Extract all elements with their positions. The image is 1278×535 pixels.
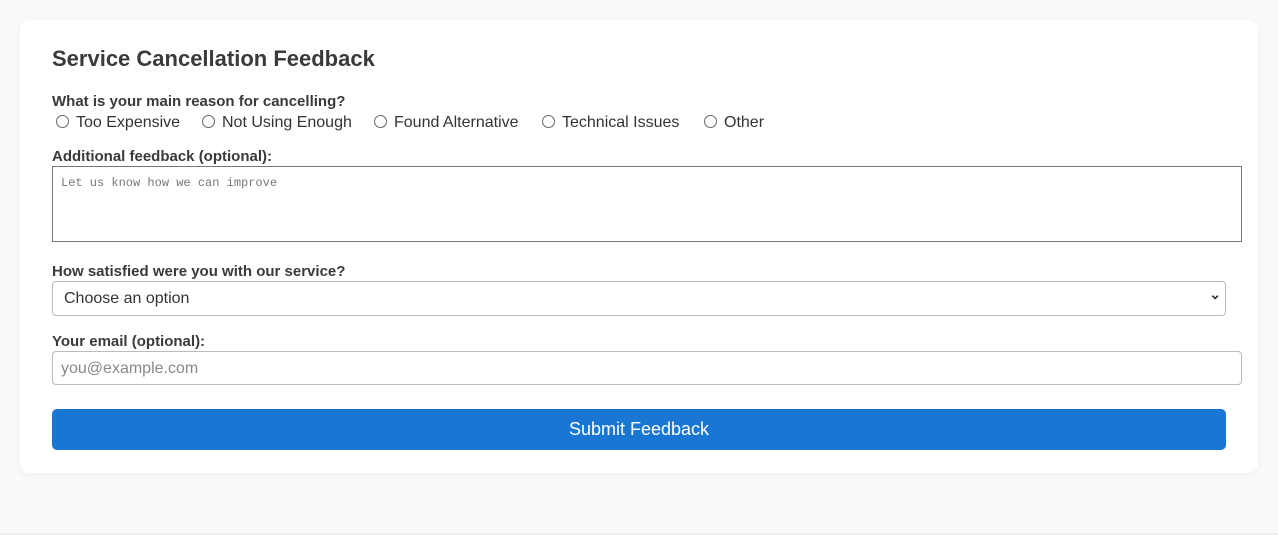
textarea: Let us know how we can improve: [61, 176, 277, 190]
radio: not using enough: Not Using Enough: [222, 114, 352, 131]
radio: other: [704, 114, 764, 131]
select dropdown: ⌄: [1209, 286, 1221, 302]
select dropdown: Choose an option: [64, 290, 189, 307]
label: satisfaction: How satisfied were you with our service?: [52, 263, 345, 280]
title: Service Cancellation Feedback: [52, 46, 375, 71]
radio options: [56, 114, 764, 131]
label: reason question: What is your main reason for cancelling?: [52, 93, 345, 110]
radio: too expensive: Too Expensive: [76, 114, 180, 131]
radio: technical issues: Technical Issues: [562, 114, 679, 131]
radio: found alternative: Found Alternative: [394, 114, 519, 131]
email input: [52, 351, 1242, 385]
select dropdown: [52, 281, 1226, 316]
label: email: Your email (optional):: [52, 333, 205, 350]
email input: you@example.com: [61, 360, 198, 377]
radio: other: Other: [724, 114, 764, 131]
textarea: [52, 166, 1242, 242]
label: additional feedback: Additional feedback (optional):: [52, 148, 272, 165]
submit button: Submit Feedback: [569, 419, 709, 439]
submit button: [52, 409, 1226, 450]
